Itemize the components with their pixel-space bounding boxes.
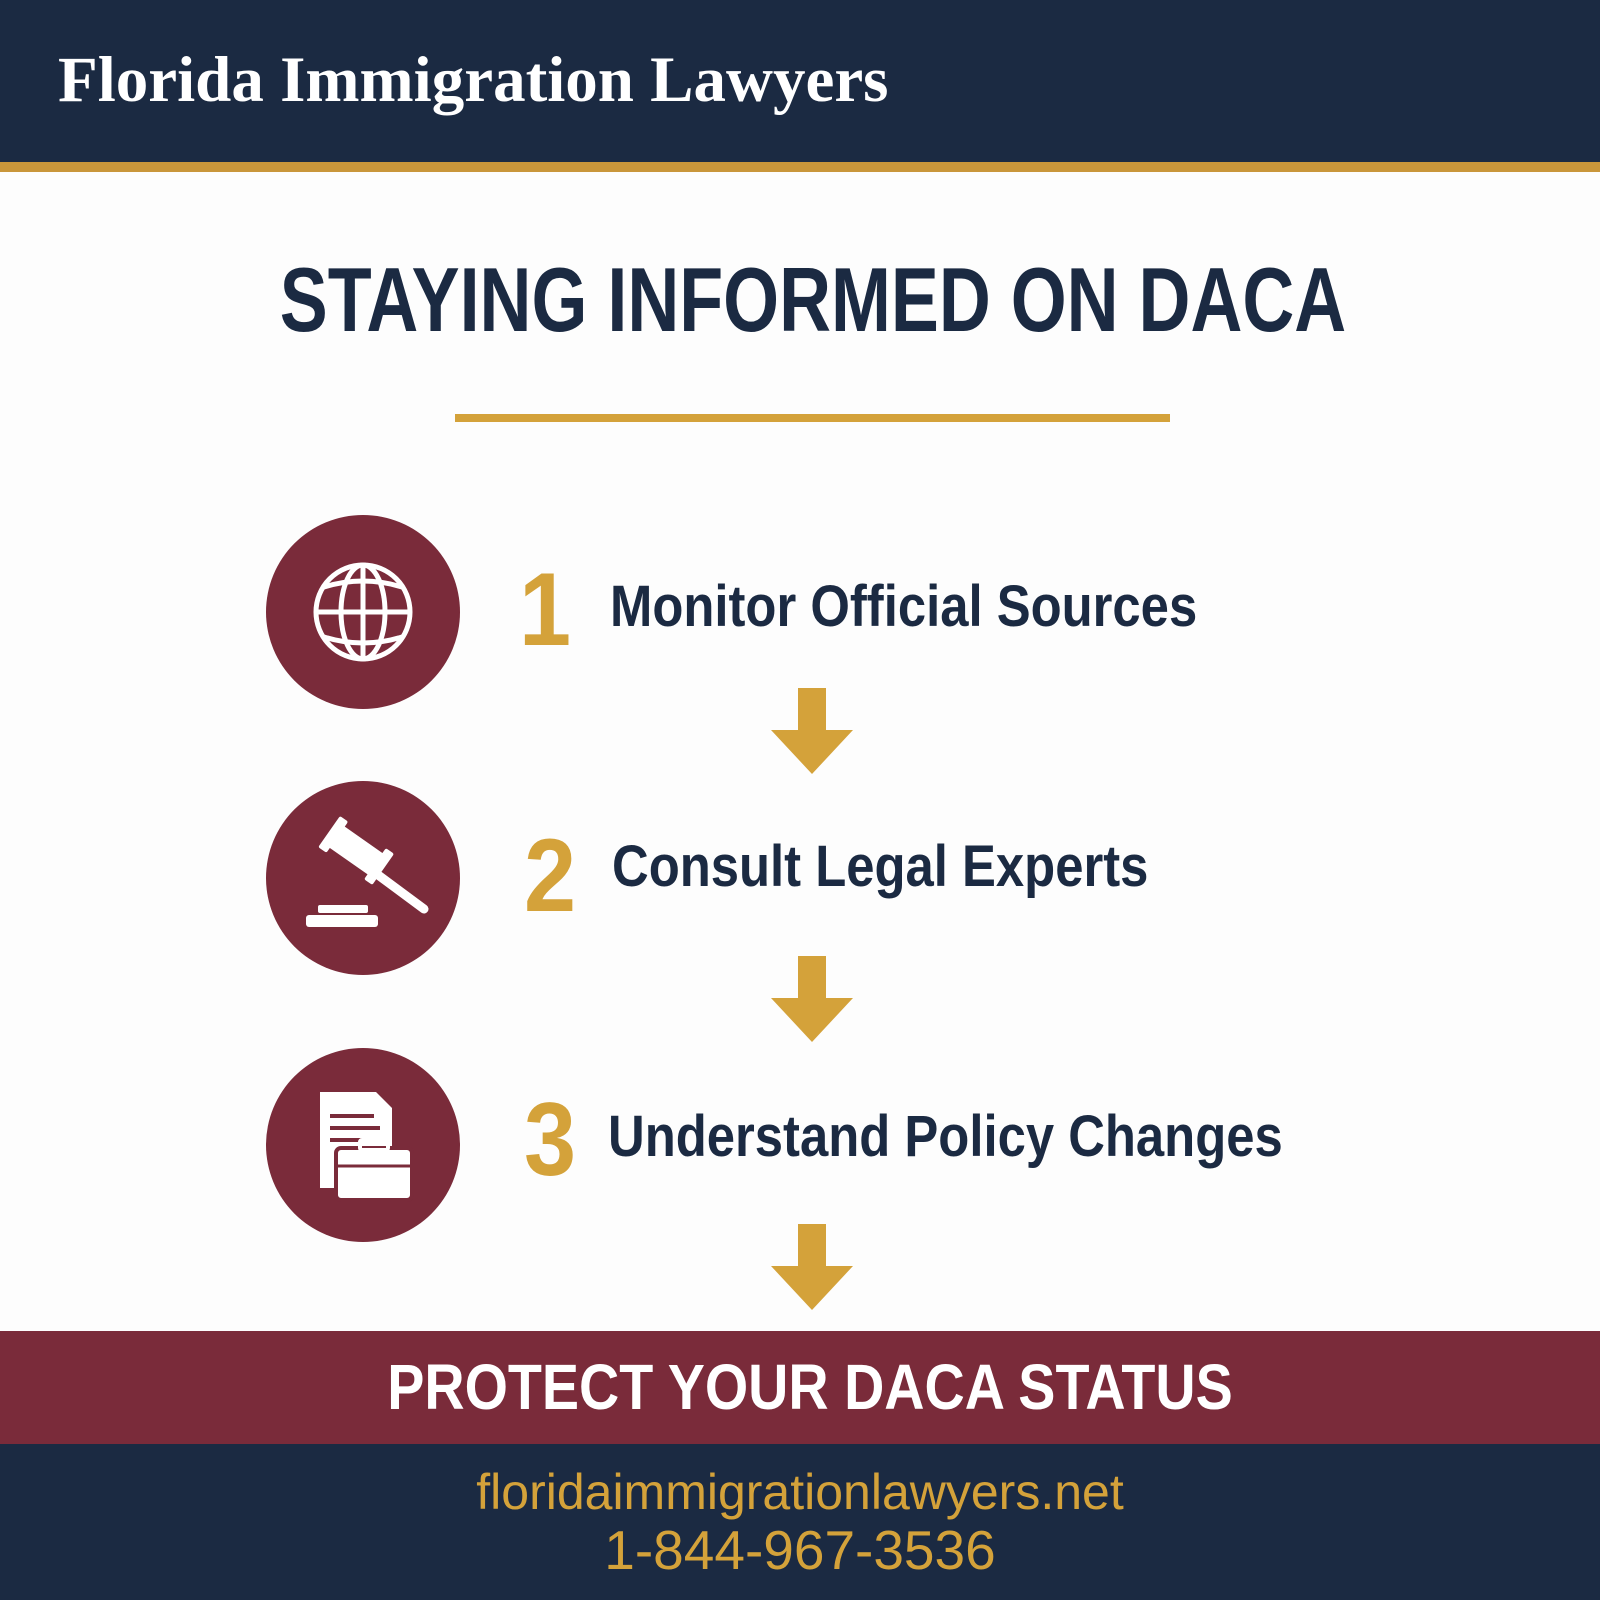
step text 2: Consult Legal Experts: [612, 834, 1148, 899]
phone: 1-844-967-3536: [604, 1519, 996, 1581]
brand name: Florida Immigration Lawyers: [58, 44, 888, 116]
title underline: [455, 414, 1170, 422]
number 3: 3: [524, 1082, 576, 1198]
title: STAYING INFORMED ON DACA: [280, 250, 1346, 351]
icon: gavel: [266, 781, 460, 975]
arrow 1: [771, 688, 853, 774]
banner: protect status: [0, 1331, 1600, 1444]
step 3: [266, 1048, 1283, 1242]
header: [0, 0, 1600, 162]
step text 3: Understand Policy Changes: [608, 1104, 1283, 1169]
step 1: [266, 515, 1197, 709]
website: floridaimmigrationlawyers.net: [476, 1464, 1124, 1520]
arrow 3: [771, 1224, 853, 1310]
step text 1: Monitor Official Sources: [610, 574, 1197, 639]
icon: document and briefcase: [266, 1048, 460, 1242]
arrow 2: [771, 956, 853, 1042]
icon: globe: [266, 515, 460, 709]
footer: [0, 1444, 1600, 1600]
banner text: PROTECT YOUR DACA STATUS: [387, 1351, 1233, 1423]
gold rule: [0, 162, 1600, 172]
step 2: [266, 781, 1148, 975]
number 1: 1: [519, 552, 571, 668]
number 2: 2: [524, 818, 576, 934]
